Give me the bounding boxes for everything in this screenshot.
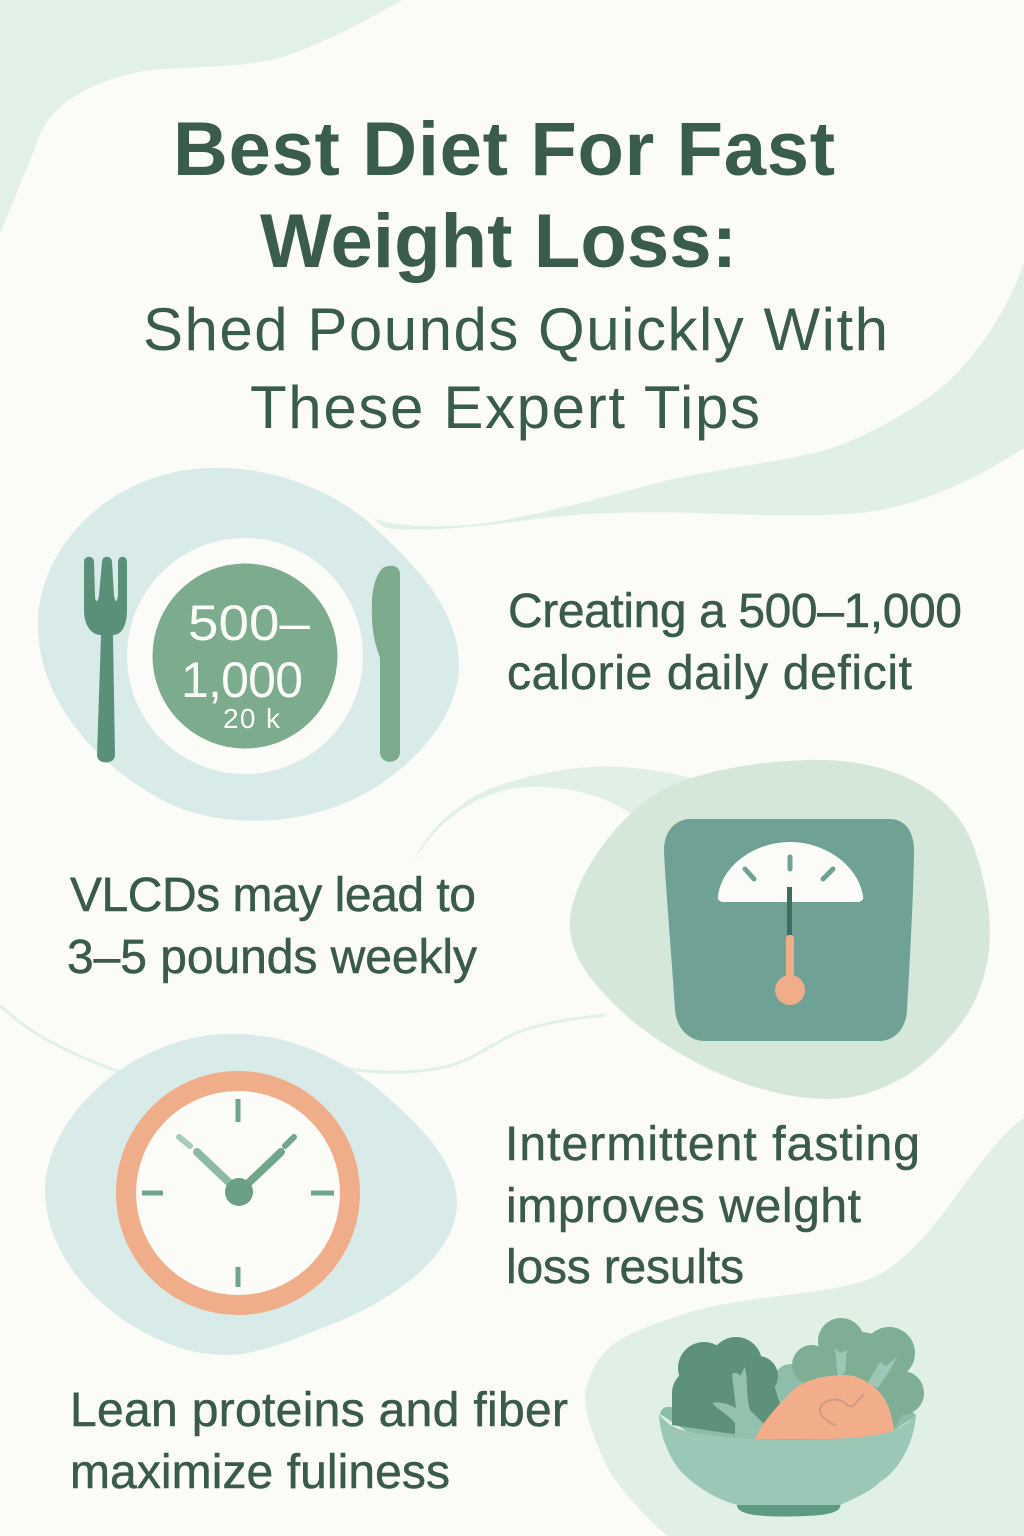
text: fasting: loss results [506, 1241, 744, 1294]
text: calorie deficit: calorie daily deficit [507, 647, 912, 700]
text: fasting: Intermittent fasting [505, 1118, 920, 1171]
back stems [835, 1348, 897, 1388]
title: These Expert Tips [250, 374, 760, 441]
text: VLCDs: VLCDs may lead to [70, 869, 476, 922]
text: fasting [505, 1118, 920, 1294]
text: calorie deficit: Creating a 500–1,000 [508, 585, 962, 638]
panel: food bowl [585, 1118, 1024, 1536]
icon: clock face [126, 1081, 350, 1305]
title [143, 107, 888, 441]
panel: clock [45, 1034, 457, 1355]
dial ticks [745, 857, 833, 879]
icon: knife [372, 566, 400, 762]
plate label: 20 k [223, 703, 281, 734]
text: proteins [70, 1384, 568, 1499]
blob: scale background [570, 760, 990, 1099]
blob: clock background [45, 1034, 457, 1355]
protein mark [820, 1395, 863, 1425]
title: Shed Pounds Quickly With [143, 296, 888, 363]
icon: plate [127, 538, 363, 774]
icon: fork [84, 557, 127, 762]
blob: bottom right background [585, 1118, 1024, 1536]
text: fasting: improves welght [506, 1180, 861, 1233]
protein [755, 1375, 894, 1439]
title: Best Diet For Fast [173, 107, 835, 192]
bowl [659, 1414, 916, 1505]
broccoli front [672, 1337, 782, 1438]
icon: scale dial [718, 842, 863, 902]
broccoli back [792, 1318, 924, 1435]
needle [787, 887, 792, 937]
text: calorie deficit [507, 585, 962, 700]
clock ticks [142, 1099, 334, 1287]
panel: calorie deficit [38, 468, 459, 821]
panel: scale [570, 760, 990, 1099]
text: VLCDs [67, 869, 477, 984]
plate label: 1,000 [181, 652, 303, 708]
orange pointer [775, 935, 805, 1005]
text: proteins: Lean proteins and fiber [70, 1384, 568, 1437]
plate label [152, 564, 338, 748]
broccoli back light [773, 1364, 809, 1420]
plate label: 500– [188, 595, 310, 651]
text: VLCDs: 3–5 pounds weekly [67, 931, 477, 984]
text: proteins: maximize fuliness [70, 1446, 450, 1499]
icon: scale body [664, 819, 914, 1041]
clock hub [225, 1178, 253, 1206]
clock hands [179, 1137, 294, 1192]
broccoli stem [712, 1367, 765, 1440]
blob: plate background [38, 468, 459, 821]
bowl foot [737, 1503, 840, 1516]
title: Weight Loss: [260, 199, 737, 284]
bowl inner rim [660, 1407, 916, 1440]
